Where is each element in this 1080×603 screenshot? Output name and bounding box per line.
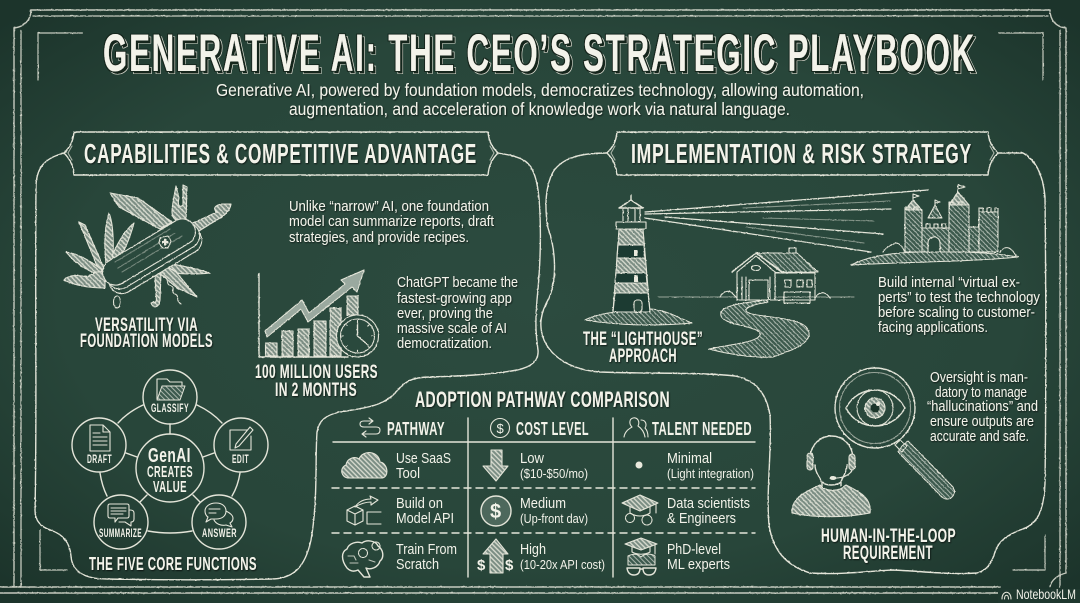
panel: capabilities and competitive advantage: [35, 132, 540, 580]
label: human in the loop: REQUIREMENT: [843, 542, 933, 564]
text: ChatGPT growth: ChatGPT became the: [397, 274, 518, 291]
row 3: scratch: Scratch: [396, 556, 439, 573]
row 2: API: Medium: [520, 495, 566, 512]
column header: cost level: $: [496, 421, 504, 436]
text: ChatGPT growth: [397, 274, 518, 352]
row 2: API: Model API: [396, 510, 454, 527]
panel outline: implementation: [541, 153, 1046, 574]
node: edit: [214, 418, 268, 472]
row 1: SaaS: Low: [520, 450, 544, 467]
node: edit: EDIT: [232, 452, 249, 466]
row 2: API: & Engineers: [667, 510, 736, 527]
diagram: five core functions: [72, 370, 268, 549]
column header: pathway: [360, 418, 445, 439]
table heading: ADOPTION PATHWAY COMPARISON: [415, 387, 670, 412]
text: narrow AI comparison: strategies, and provide recipes.: [289, 229, 469, 246]
node: classify: [143, 370, 197, 424]
row 3: scratch: [342, 538, 730, 577]
icon: graduation cap and gears: [622, 495, 658, 525]
heading banner: implementation: [607, 132, 998, 175]
label: lighthouse approach: [583, 328, 703, 367]
label: 100 million users: 100 MILLION USERS: [255, 361, 378, 383]
label: human in the loop: [821, 525, 956, 564]
label: versatility: [80, 314, 213, 352]
icon: magnifying glass with eye: [835, 368, 955, 499]
node: draft: [72, 418, 126, 472]
row 2: API: Data scientists: [667, 495, 750, 512]
icon: arrow up with dollars: [477, 539, 514, 574]
hub: GenAI creates value: VALUE: [153, 479, 187, 496]
panel outline: capabilities: [35, 153, 540, 580]
text: oversight: [927, 369, 1038, 445]
row 3: scratch: ML experts: [667, 556, 730, 573]
row 3: scratch: Train From: [396, 541, 457, 558]
icon: person with headset: [792, 436, 870, 517]
text: oversight: ensure outputs are: [930, 413, 1034, 430]
table grid: [333, 418, 755, 577]
row 2: API: $: [490, 501, 502, 523]
text: ChatGPT growth: massive scale of AI: [397, 320, 507, 337]
label: 100 million users: IN 2 MONTHS: [275, 379, 357, 401]
icon: brain with gears: [342, 541, 383, 577]
text: narrow AI comparison: [289, 198, 495, 246]
text: virtual experts: before scaling to customer-: [878, 304, 1035, 321]
text: oversight: accurate and safe.: [930, 428, 1029, 445]
column header: talent needed: [624, 418, 752, 439]
text: ChatGPT growth: democratization.: [397, 335, 492, 352]
node: answer: ANSWER: [202, 526, 237, 540]
panel: adoption pathway comparison table: [332, 387, 755, 577]
illustration: light beams: [645, 190, 928, 252]
row 1: SaaS: Minimal: [667, 450, 712, 467]
illustration: barn and winding road: [658, 248, 854, 357]
row 2: API: [347, 495, 750, 527]
icon: dollar coin: [481, 496, 511, 526]
subtitle: augmentation, and acceleration of knowledge work via natural language.: [289, 99, 790, 119]
label: lighthouse approach: APPROACH: [609, 345, 677, 367]
row 1: SaaS: Tool: [396, 465, 420, 482]
label: 100 million users: [255, 361, 378, 401]
text: virtual experts: Build internal “virtual ex-: [878, 274, 1020, 291]
column header: pathway: PATHWAY: [387, 419, 445, 439]
column header: cost level: [490, 418, 589, 439]
icon: arrow up with dollars: $: [505, 557, 514, 574]
text: oversight: “hallucinations” and: [927, 398, 1038, 415]
label: versatility: FOUNDATION MODELS: [80, 330, 213, 352]
row 1: SaaS: ($10-$50/mo): [520, 466, 588, 481]
row 2: API: (Up-front dav): [520, 511, 588, 526]
heading banner: capabilities: [64, 132, 498, 175]
icon: swiss army knife: [64, 185, 231, 308]
hub: GenAI creates value: [136, 434, 204, 502]
text: narrow AI comparison: model can summarize reports, draft: [289, 213, 495, 230]
icon: dot: [636, 462, 642, 468]
label: versatility: VERSATILITY VIA: [95, 314, 198, 336]
illustration: lighthouse: [585, 195, 692, 325]
row 2: API: Build on: [396, 495, 443, 512]
chart: user growth bars with arrow and clock: [259, 270, 378, 357]
label: human in the loop: HUMAN-IN-THE-LOOP: [821, 525, 956, 547]
node: answer: [192, 495, 246, 549]
label: lighthouse approach: THE “LIGHTHOUSE”: [583, 328, 703, 350]
text: ChatGPT growth: ever, proving the: [397, 305, 493, 322]
node: summarize: SUMMARIZE: [99, 528, 142, 540]
text: ChatGPT growth: fastest-growing app: [397, 290, 512, 307]
panel: implementation and risk strategy: [541, 132, 1046, 574]
column header: talent needed: TALENT NEEDED: [652, 419, 752, 439]
text: virtual experts: [878, 274, 1040, 336]
hub: GenAI creates value: CREATES: [147, 464, 193, 481]
icon: mortarboard, book and glasses: [625, 538, 657, 575]
text: virtual experts: perts” to test the technology: [878, 289, 1040, 306]
row 1: SaaS: [342, 450, 754, 482]
text: oversight: datory to manage: [935, 384, 1027, 401]
icon: arrow down: [483, 450, 508, 481]
row 1: SaaS: Use SaaS: [396, 450, 451, 467]
label: five core functions: THE FIVE CORE FUNCTIONS: [89, 553, 257, 574]
illustration: castle: [851, 185, 1018, 265]
subtitle: Generative AI, powered by foundation models, democratizes technology, allowing automation,: [216, 80, 864, 100]
icon: cloud: [342, 453, 387, 478]
node: classify: GLASSIFY: [151, 401, 189, 415]
node: summarize: [94, 495, 148, 549]
icon: cube and arrow: [347, 496, 381, 525]
node: draft: DRAFT: [87, 452, 112, 466]
column header: cost level: COST LEVEL: [516, 419, 589, 439]
row 3: scratch: High: [520, 541, 546, 558]
heading banner: capabilities: CAPABILITIES & COMPETITIVE ADVANTAGE: [84, 138, 477, 169]
text: oversight: Oversight is man-: [930, 369, 1028, 386]
text: virtual experts: facing applications.: [878, 319, 988, 336]
hub: GenAI creates value: GenAI: [148, 445, 191, 467]
connecting ring and spokes: [100, 405, 240, 533]
row 1: SaaS: (Light integration): [667, 466, 754, 481]
icon: arrow up with dollars: $: [477, 557, 486, 574]
row 3: scratch: PhD-level: [667, 541, 721, 558]
text: narrow AI comparison: Unlike “narrow” AI, one foundation: [289, 198, 489, 215]
subtitle: [216, 80, 864, 119]
row 3: scratch: (10-20x API cost): [520, 557, 605, 572]
